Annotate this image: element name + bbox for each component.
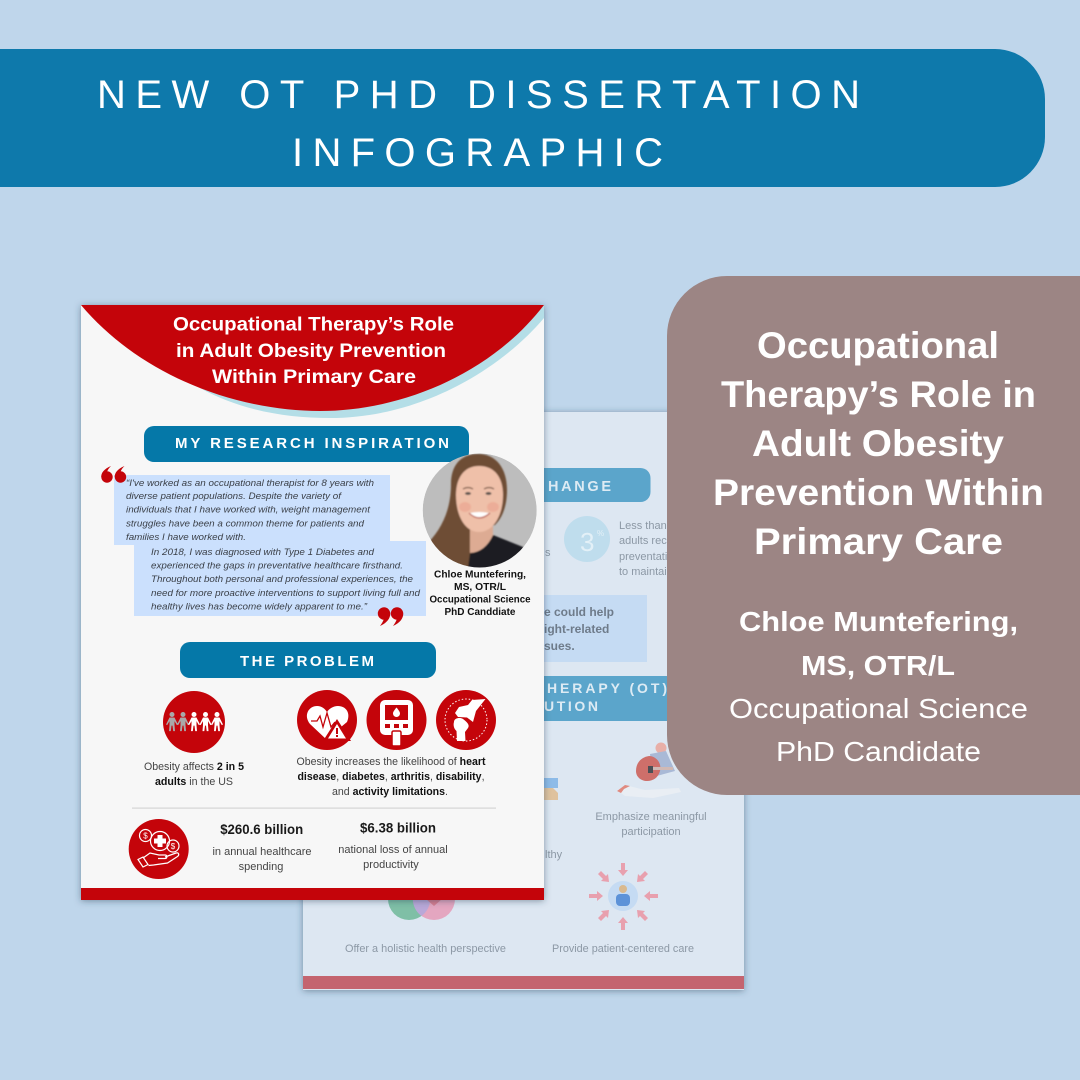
main title (173, 314, 454, 388)
3 percent stat: adults rec (619, 535, 667, 547)
panel title: Occupational (757, 325, 999, 366)
back labels: Provide patient-centered care (552, 943, 694, 955)
stat: healthcare spending: $260.6 billion (220, 822, 303, 837)
icon: person fragment (544, 778, 558, 800)
text: obesity risks: and activity limitations. (332, 786, 448, 798)
back callout (500, 595, 647, 662)
panel author: PhD Candidate (776, 736, 981, 767)
main title: Occupational Therapy’s Role (173, 314, 454, 336)
stat: healthcare spending (212, 822, 312, 873)
quote part two (151, 547, 421, 612)
back callout: ight-related (544, 622, 609, 636)
quote panel (114, 475, 426, 616)
summary panel (667, 276, 1080, 795)
portrait photo (423, 454, 538, 578)
panel author: MS, OTR/L (801, 650, 955, 681)
icon: glucose meter (366, 690, 426, 750)
3 percent stat: % (597, 529, 604, 538)
3 percent stat: Less than (619, 520, 667, 532)
icon: people 2 in 5 (163, 691, 225, 753)
icon: venn holistic (388, 878, 455, 920)
text: 2 in 5 adults (144, 761, 244, 788)
banner title: INFOGRAPHIC (292, 131, 663, 175)
portrait caption: PhD Canddiate (444, 606, 516, 618)
quote part two: healthy lives has become widely apparent to me.” (151, 602, 368, 612)
text: 2 in 5 adults: adults in the US (155, 776, 233, 788)
heading pill: the problem: THE PROBLEM (240, 653, 374, 670)
icon: healthcare money: $ (143, 832, 148, 840)
3 percent stat: preventati (619, 551, 667, 563)
back heading pill: change (440, 468, 650, 502)
banner title (97, 73, 860, 175)
3 percent stat: to maintai (619, 566, 667, 578)
quote part two: Throughout both personal and professional experiences, the (151, 574, 413, 585)
text: obesity risks: disease, diabetes, arthritis, disability, (297, 771, 484, 783)
back heading pill: OT contribution (440, 676, 690, 721)
banner title: NEW OT PHD DISSERTATION (97, 73, 860, 117)
quote part one: diverse patient populations. Despite the variety of (126, 491, 342, 502)
icon: opening quote mark (101, 466, 126, 483)
panel author: Occupational Science (729, 693, 1028, 724)
stat: productivity loss (338, 820, 448, 871)
back document page (303, 412, 744, 990)
panel title: Primary Care (754, 521, 1003, 562)
panel title: Prevention Within (713, 472, 1044, 513)
icon: healthcare money: $ (171, 842, 176, 851)
main footer bar (81, 888, 544, 900)
icon: closing quote mark (378, 607, 403, 626)
text fragment: lthy (545, 849, 563, 861)
panel title (713, 325, 1044, 562)
panel author: Chloe Muntefering, (739, 606, 1018, 637)
heading pill: the problem (180, 642, 436, 678)
quote part two: In 2018, I was diagnosed with Type 1 Diabetes and (151, 547, 375, 558)
3 percent stat: 3 (580, 527, 594, 557)
stat: healthcare spending: in annual healthcare (212, 846, 312, 858)
icon: heart disease (297, 690, 357, 750)
back footer bar (303, 976, 744, 989)
icon: patient centered arrows (589, 863, 658, 930)
portrait caption: MS, OTR/L (454, 581, 507, 593)
icon: healthcare money (129, 819, 189, 879)
panel title: Therapy’s Role in (721, 374, 1036, 415)
back labels (345, 943, 694, 955)
quote part two: experienced the gaps in preventative healthcare firsthand. (151, 560, 403, 572)
stat: productivity loss: productivity (363, 859, 419, 871)
heading pill: my research inspiration (144, 426, 469, 462)
back heading pill: OT contribution: UTION (544, 698, 598, 714)
stat: healthcare spending: spending (239, 861, 283, 873)
panel author (729, 606, 1028, 767)
quote part one (126, 478, 374, 543)
portrait caption (430, 568, 531, 618)
portrait caption: Chloe Muntefering, (434, 568, 526, 580)
back heading pill: OT contribution: HERAPY (OT) (547, 680, 667, 696)
icon: person playing guitar (617, 742, 681, 798)
back callout: e could help (544, 605, 614, 619)
stat: productivity loss: national loss of annual (338, 844, 448, 856)
header arc (81, 305, 544, 418)
back callout: sues. (544, 639, 575, 653)
text: 2 in 5 adults: Obesity affects 2 in 5 (144, 761, 244, 773)
back heading pill: change: HANGE (548, 479, 611, 495)
3 percent stat: s (545, 547, 551, 559)
back labels: Offer a holistic health perspective (345, 943, 506, 955)
panel title: Adult Obesity (752, 423, 1004, 464)
quote part one: struggles have been a common theme for patients and (126, 518, 365, 530)
quote part one: families I have worked with. (126, 532, 246, 543)
quote part two: need for more proactive interventions to support living full and (151, 588, 421, 599)
heading pill: my research inspiration: MY RESEARCH INSPIRATION (175, 435, 449, 452)
3 percent stat (545, 516, 667, 578)
banner (0, 49, 1045, 187)
text: obesity risks: Obesity increases the likelihood of heart (296, 756, 486, 768)
main title: Within Primary Care (212, 366, 416, 388)
main document page (81, 305, 544, 900)
main title: in Adult Obesity Prevention (176, 340, 446, 362)
portrait caption: Occupational Science (430, 594, 531, 606)
label: emphasize participation: Emphasize meaningful (595, 811, 707, 823)
icon: arthritic joint (436, 690, 496, 750)
text: obesity risks (296, 756, 486, 798)
stat: productivity loss: $6.38 billion (360, 820, 436, 836)
label: emphasize participation: participation (621, 826, 681, 838)
quote part one: individuals that I have worked with, weight management (126, 504, 370, 516)
quote part one: “I've worked as an occupational therapist for 8 years with (126, 478, 374, 489)
